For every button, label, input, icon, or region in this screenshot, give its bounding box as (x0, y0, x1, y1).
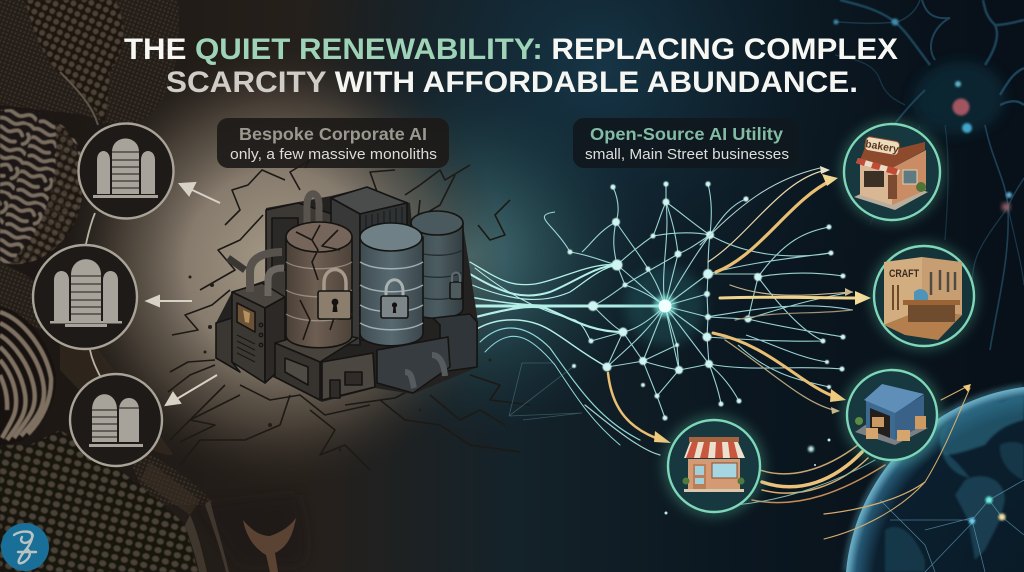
far right box (433, 314, 477, 372)
circle: bakery (840, 120, 944, 224)
globe (846, 387, 1024, 572)
title: THE QUIET RENEWABILITY: REPLACING COMPLEX (124, 33, 898, 66)
continents (885, 397, 1024, 572)
logo badge (1, 523, 49, 571)
circle: shop (663, 415, 765, 517)
far left box (216, 318, 240, 372)
left pipes (250, 252, 282, 292)
top pipe (307, 194, 319, 225)
circle: silo icon middle (33, 245, 137, 349)
brown tank (286, 222, 352, 348)
circle: silo icon top (78, 124, 174, 218)
arrowheads (654, 166, 971, 443)
back tall block (331, 187, 407, 345)
circle: silo icon bottom (70, 374, 162, 466)
circle: craft workshop: CRAFT (889, 268, 919, 280)
circle: bakery: bakery (864, 138, 900, 156)
grey tank (360, 223, 423, 346)
debris specks (188, 259, 492, 452)
label: bespoke corporate AI: Bespoke Corporate AI (239, 124, 427, 144)
cluster shadow silhouette (216, 187, 478, 402)
cracked ground (168, 160, 530, 470)
label: open-source AI utility: small, Main Street businesses (585, 146, 789, 163)
network hub (544, 181, 853, 420)
title (124, 33, 898, 99)
arrow: to bottom silo (166, 375, 217, 405)
golden flow arrows (585, 168, 970, 539)
grey tank base (377, 337, 450, 393)
scattered sparks (664, 438, 830, 514)
circle: craft workshop (870, 242, 978, 350)
back left block (266, 203, 335, 300)
brown tank base (275, 330, 375, 400)
dim background mesh (509, 363, 582, 420)
streams from monoliths to hub (470, 262, 665, 445)
left control unit (232, 283, 285, 383)
left organic textures (0, 0, 306, 572)
padlock on brown tank (318, 270, 351, 319)
back right tank (411, 211, 463, 318)
arrow: to top silo (180, 183, 220, 203)
title: SCARCITY WITH AFFORDABLE ABUNDANCE. (166, 66, 858, 99)
circle: warehouse (842, 365, 942, 465)
label: open-source AI utility (573, 118, 799, 168)
monolith cluster (216, 187, 478, 402)
label: open-source AI utility: Open-Source AI Utility (590, 124, 783, 144)
connectors between left circles (86, 213, 100, 376)
label: bespoke corporate AI (217, 118, 449, 168)
arrow: to middle silo (147, 296, 192, 306)
padlock on grey tank (381, 280, 408, 318)
neuron network, top right (834, 0, 1024, 350)
label: bespoke corporate AI: only, a few massive monoliths (230, 146, 437, 163)
